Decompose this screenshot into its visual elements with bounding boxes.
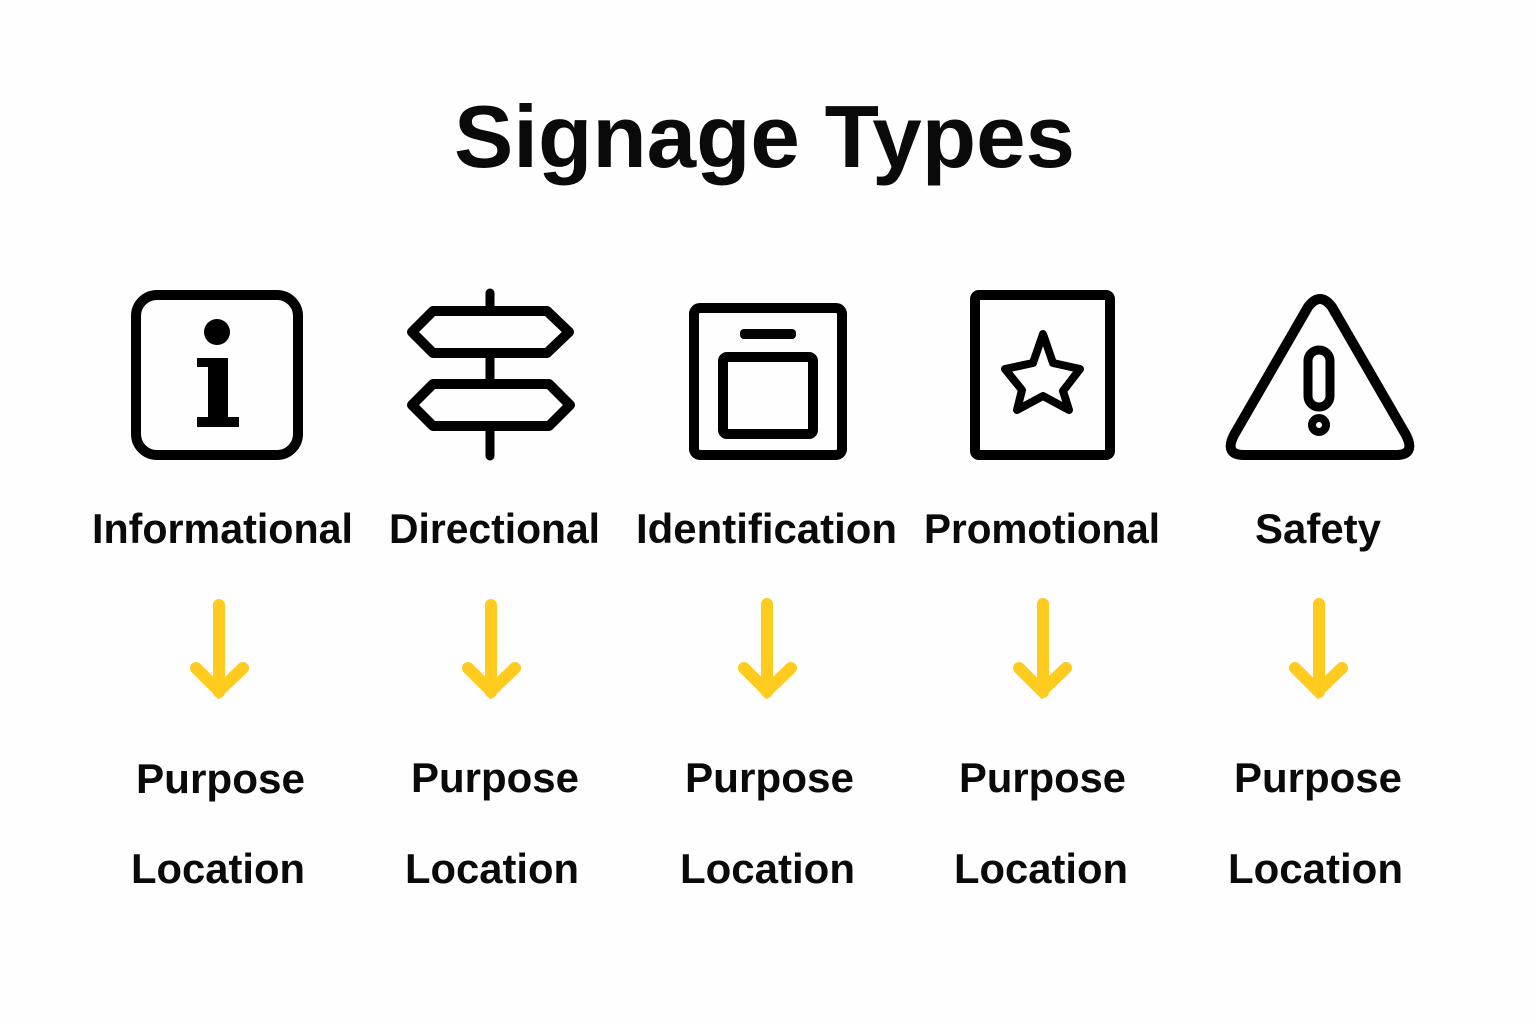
text: location: Location <box>954 845 1128 892</box>
column: safety <box>1228 299 1409 892</box>
text: purpose: Purpose <box>685 754 854 801</box>
arrow: safety <box>1295 604 1342 692</box>
text: purpose: Purpose <box>411 754 579 801</box>
text: purpose: Purpose <box>1234 754 1402 801</box>
label: informational: Informational <box>92 505 353 552</box>
icon: identification plate <box>694 308 842 455</box>
arrow: directional <box>468 605 515 692</box>
column: identification <box>636 308 897 892</box>
label: safety: Safety <box>1255 505 1382 552</box>
icon: signpost <box>412 293 570 456</box>
text: location: Location <box>405 845 579 892</box>
text: location: Location <box>680 845 855 892</box>
column: promotional <box>924 295 1160 892</box>
label: promotional: Promotional <box>924 505 1160 552</box>
icon: information sign <box>136 295 298 455</box>
label: identification: Identification <box>636 505 897 552</box>
title: Signage Types <box>454 87 1075 186</box>
text: purpose: Purpose <box>959 754 1126 801</box>
column: informational <box>92 295 353 892</box>
icon: star poster <box>975 295 1110 455</box>
arrow: identification <box>744 604 791 692</box>
arrow: informational <box>196 605 243 692</box>
text: location: Location <box>1228 845 1403 892</box>
column: directional <box>389 293 600 892</box>
text: location: Location <box>131 845 305 892</box>
icon: warning triangle <box>1231 299 1409 455</box>
text: purpose: Purpose <box>136 755 305 802</box>
arrow: promotional <box>1019 604 1066 692</box>
label: directional: Directional <box>389 505 600 552</box>
